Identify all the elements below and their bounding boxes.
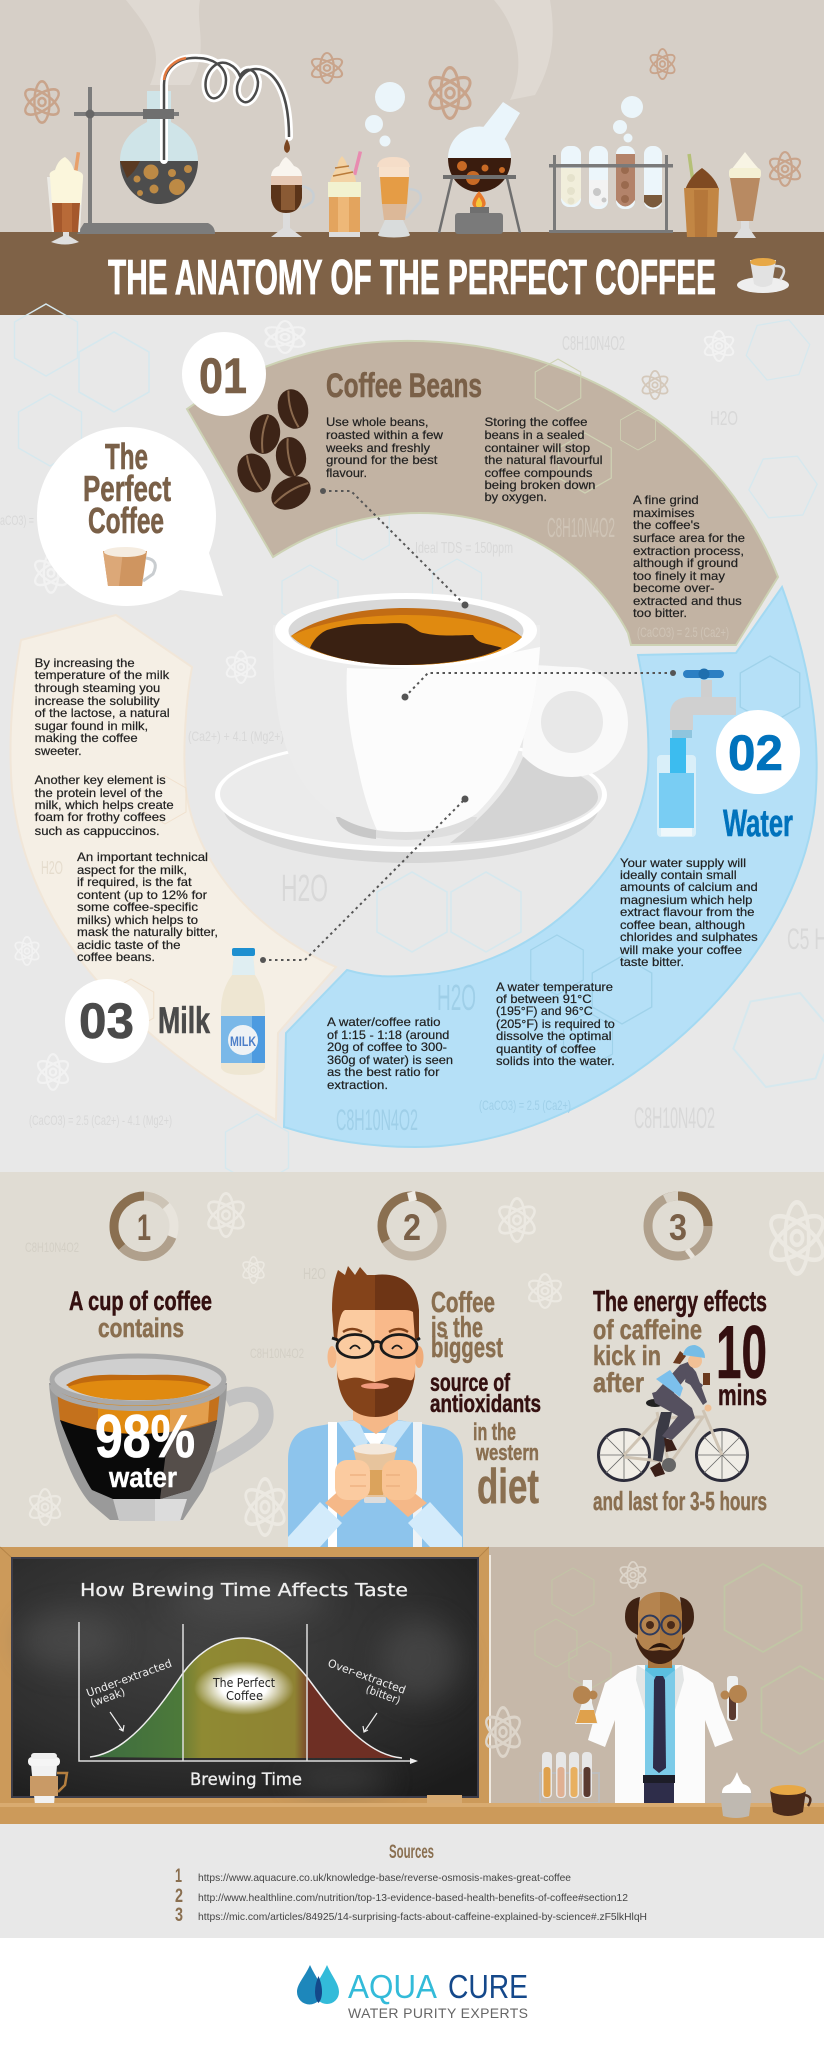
speech bubble: The Perfect Coffee (37, 427, 223, 606)
text: beans column 2: the natural flavourful (484, 453, 602, 467)
wooden shelf (0, 1803, 824, 1824)
text: water supply: chlorides and sulphates (620, 930, 758, 944)
text: beans column 1 (325, 415, 443, 480)
fact 3 text: of caffeine (593, 1314, 702, 1345)
panel: coffee beans arc: (CaCO3) = 2.5 (Ca2+) (637, 624, 729, 640)
text: water supply: amounts of calcium and (620, 880, 758, 894)
speech bubble: The Perfect Coffee: The (105, 436, 148, 477)
background formula labels: (CaCO3) = 2.5 (Ca2+) - 4.1 (Mg2+) (29, 1112, 172, 1128)
heading: Sources: Sources (389, 1842, 434, 1863)
speech bubble: The Perfect Coffee: Perfect (83, 468, 171, 509)
text: beans column 3: extraction process, (633, 544, 744, 558)
lab stand and distillation flask (74, 58, 290, 234)
panel: water arc: C8H10N4O2 (336, 1104, 418, 1137)
fact 2 text: is the (431, 1312, 483, 1344)
sources list: 2 (175, 1886, 183, 1907)
text: milk paragraph 1 (35, 656, 170, 758)
chart: brewing time curve (79, 1622, 418, 1764)
text: water temperature: (205°F) is required to (496, 1017, 615, 1031)
text: milk paragraph 1: By increasing the (35, 656, 135, 670)
text: beans column 2: Storing the coffee (484, 415, 588, 429)
bubbles (365, 82, 643, 146)
number 01 (182, 332, 266, 416)
icon: milk bottle (221, 948, 265, 1075)
panel: milk arc: H2O (41, 858, 63, 878)
fact 2 text: Coffee (431, 1287, 495, 1319)
fact 2 text: antioxidants (430, 1390, 541, 1418)
text: milk paragraph 1: making the coffee (35, 731, 138, 745)
fact 2 ring: 2 (403, 1207, 421, 1248)
text: water ratio: as the best ratio for (327, 1065, 440, 1079)
text: milk paragraph 1: of the lactose, a natural (35, 706, 170, 720)
fact 3 ring (648, 1196, 708, 1256)
test tube rack (549, 146, 673, 233)
label: under-extracted: Under-extracted (85, 1657, 174, 1700)
text: beans column 3: A fine grind (633, 493, 699, 507)
panel: water arc: (CaCO3) = 2.5 (Ca2+) (479, 1097, 571, 1113)
speech bubble: The Perfect Coffee: Coffee (88, 500, 164, 541)
facts decorations: H2O (303, 1266, 326, 1283)
heading: Coffee Beans: Coffee Beans (326, 367, 482, 405)
text: water temperature: A water temperature (496, 980, 613, 994)
title band (0, 232, 824, 315)
connector: beans to cup (320, 488, 468, 608)
text: water supply (619, 856, 758, 969)
text: water supply: Your water supply will (620, 856, 746, 870)
text: milk paragraph 1: through steaming you (35, 681, 160, 695)
facts decorations (25, 1193, 824, 1535)
text: milk paragraph 2 (35, 773, 174, 838)
number 03 (65, 979, 149, 1063)
text: milk paragraph 3: milks) which helps to (77, 913, 198, 927)
text: beans column 2 (484, 415, 602, 504)
sources list: 1 (175, 1866, 182, 1887)
icon: shelf cups (720, 1772, 810, 1818)
text: beans column 1: weeks and freshly (325, 441, 430, 455)
drink: coffee with cream (271, 157, 314, 237)
text: milk paragraph 3: acidic taste of the (77, 938, 181, 952)
text: water supply: taste bitter. (620, 955, 684, 969)
text: beans column 3: although if ground (633, 556, 738, 570)
fact 2 ring (382, 1192, 442, 1256)
coffee cup (273, 593, 628, 840)
label: over-extracted: Over-extracted (326, 1657, 407, 1697)
fact 2 text: source of (430, 1369, 510, 1397)
text: milk paragraph 1: increase the solubility (35, 694, 160, 708)
drink: tall cream glass (729, 152, 761, 238)
text: milk paragraph 2: such as cappuccinos. (35, 824, 160, 838)
text: beans column 1: roasted within a few (326, 428, 443, 442)
logo: Aqua Cure: CURE (448, 1968, 528, 2005)
chart title: How Brewing Time Affects Taste (80, 1580, 408, 1601)
chalkboard surface (13, 1559, 477, 1796)
fact 3 text: after (593, 1367, 644, 1398)
text: beans column 3: become over- (633, 581, 714, 595)
main background (0, 315, 824, 1172)
text: beans column 1: flavour. (326, 466, 367, 480)
background atoms (13, 321, 736, 1090)
illustration: scientist (573, 1592, 747, 1803)
fact 3 text: mins (718, 1379, 767, 1412)
icon: coffee beans (232, 386, 317, 516)
header background (0, 0, 824, 232)
icon: latte mug (103, 547, 155, 586)
text: water temperature: solids into the water. (496, 1054, 615, 1068)
chalk ledge (427, 1795, 462, 1804)
icon: takeaway cup (28, 1753, 67, 1806)
text: beans column 1: Use whole beans, (326, 415, 428, 429)
illustration: coffee cup 98% water: 98% (95, 1403, 195, 1470)
text: milk paragraph 2: the protein level of the (35, 786, 163, 800)
number 01: 01 (199, 348, 247, 404)
drink: iced mocha (684, 154, 719, 237)
text: water ratio: 20g of coffee to 300- (327, 1040, 447, 1054)
text: beans column 3 (633, 493, 745, 620)
heading: Milk: Milk (158, 1000, 210, 1041)
header atoms (22, 49, 803, 186)
fact 2 text (430, 1287, 541, 1514)
fact 3 text (593, 1286, 767, 1516)
text: water supply: extract flavour from the (620, 905, 755, 919)
facts decorations: C8H10N4O2 (25, 1239, 79, 1255)
chalk smudges (20, 1578, 460, 1792)
text: water supply: magnesium which help (620, 893, 753, 907)
text: beans column 2: coffee compounds (484, 466, 592, 480)
text: milk paragraph 3: coffee beans. (77, 950, 155, 964)
text: water supply: ideally contain small (620, 868, 737, 882)
chart x-axis label: Brewing Time (190, 1770, 302, 1790)
text: beans column 1: ground for the best (326, 453, 438, 467)
panel: coffee beans arc: C8H10N4O2 (547, 512, 615, 543)
background formula labels: C8H10N4O2 (634, 1102, 715, 1135)
text: milk paragraph 3: mask the naturally bitter, (77, 925, 218, 939)
icon: test tube rack (540, 1752, 599, 1803)
number 03: 03 (79, 993, 134, 1049)
number 02: 02 (728, 725, 783, 781)
fact 3 text: kick in (593, 1340, 661, 1371)
panel: water arc (284, 587, 817, 1147)
logo: Aqua Cure: WATER PURITY EXPERTS (348, 2005, 528, 2021)
fact 2 text: diet (477, 1460, 539, 1514)
right lab panel (483, 1547, 824, 1803)
drink: sundae glass (47, 152, 83, 244)
panel: sources background (0, 1824, 824, 1938)
sources list: 3 (175, 1905, 183, 1926)
text: water temperature: quantity of coffee (496, 1042, 596, 1056)
text: milk paragraph 3: some coffee-specific (77, 900, 198, 914)
text: milk paragraph 1: sugar found in milk, (35, 719, 148, 733)
text: beans column 3: the coffee's (633, 518, 700, 532)
background formula labels: aCO3) = (0, 512, 34, 528)
fact 1 ring (114, 1196, 174, 1256)
text: milk paragraph 2: Another key element is (35, 773, 166, 787)
number 02 (716, 710, 800, 794)
footer background (0, 1938, 824, 2048)
facts decorations: C8H10N4O2 (250, 1345, 304, 1361)
text: water temperature: of between 91°C (496, 992, 592, 1006)
fact 1 heading (69, 1286, 212, 1343)
text: water ratio: 360g of water) is seen (327, 1053, 453, 1067)
fact 1 heading: contains (98, 1313, 184, 1343)
connector: milk to cup (260, 796, 468, 963)
icon: title cup (737, 258, 789, 293)
illustration: bearded man (288, 1266, 463, 1547)
steam (126, 0, 553, 100)
text: beans column 2: container will stop (484, 441, 590, 455)
text: beans column 3: extracted and thus (633, 594, 742, 608)
fact 1 ring: 1 (137, 1207, 151, 1248)
panel: water arc: H2O (437, 977, 476, 1018)
text: water temperature: dissolve the optimal (496, 1029, 612, 1043)
background formula labels: C8H10N4O2 (562, 333, 625, 355)
sources list (175, 1866, 647, 1926)
background formula labels: Ideal TDS = 150ppm (415, 540, 513, 557)
fact 2 text: biggest (431, 1332, 503, 1364)
text: beans column 2: by oxygen. (484, 490, 547, 504)
fact 1 heading: A cup of coffee (69, 1286, 212, 1316)
fact 3 ring: 3 (669, 1207, 687, 1248)
text: beans column 3: maximises (633, 506, 694, 520)
sources list: https://mic.com/articles/84925/14-surprising-facts-about-caffeine-explained-by-science#.zF5lkHlqH (198, 1911, 647, 1923)
text: milk paragraph 3 (77, 850, 218, 964)
text: water ratio: A water/coffee ratio (327, 1015, 441, 1029)
text: beans column 2: being broken down (484, 478, 596, 492)
burner with round flask (439, 102, 520, 234)
text: milk paragraph 2: milk, which helps create (35, 798, 174, 812)
text: beans column 2: beans in a sealed (484, 428, 584, 442)
text: milk paragraph 3: if required, is the fat (77, 875, 192, 889)
text: water supply: coffee bean, although (620, 918, 745, 932)
illustration: coffee cup 98% water: water (108, 1462, 177, 1494)
text: water ratio: extraction. (327, 1078, 388, 1092)
text: milk paragraph 3: content (up to 12% for (77, 888, 207, 902)
text: milk paragraph 3: aspect for the milk, (77, 863, 187, 877)
label: The Perfect Coffee (212, 1676, 275, 1703)
sources list: https://www.aquacure.co.uk/knowledge-base/reverse-osmosis-makes-great-coffee (198, 1872, 571, 1884)
background formula labels: (Ca2+) + 4.1 (Mg2+) (188, 728, 284, 744)
text: milk paragraph 3: An important technical (77, 850, 208, 864)
label: under-extracted: (weak) (89, 1685, 127, 1710)
text: water supply: will make your coffee (619, 943, 742, 957)
background formula labels: H2O (710, 408, 738, 430)
panel: milk arc (10, 615, 336, 1120)
text: water temperature: (195°F) and 96°C (496, 1004, 593, 1018)
panel: chalkboard frame (0, 1547, 489, 1804)
background hexagons (14, 304, 824, 1186)
background formula labels: H2O (281, 868, 328, 910)
icon: tap and glass (657, 668, 736, 837)
text: beans column 3: too finely it may (633, 569, 725, 583)
text: water temperature (496, 980, 615, 1068)
cup handle (522, 665, 628, 777)
text: milk paragraph 1: temperature of the milk (35, 668, 170, 682)
label: The Perfect Coffee: Coffee (226, 1689, 263, 1703)
saucer (215, 738, 607, 863)
logo: Aqua Cure: AQUA (348, 1968, 437, 2005)
label: The Perfect Coffee: The Perfect (212, 1676, 275, 1690)
fact 2 text: in the (473, 1419, 516, 1446)
text: milk paragraph 2: foam for frothy coffees (35, 810, 166, 824)
sources list: http://www.healthline.com/nutrition/top-13-evidence-based-health-benefits-of-coffee#section12 (198, 1892, 628, 1904)
label: over-extracted: (bitter) (364, 1683, 402, 1707)
logo: Aqua Cure (297, 1965, 528, 2021)
icon: milk bottle: MILK (230, 1033, 256, 1049)
text: beans column 3: surface area for the (633, 531, 745, 545)
text: beans column 3: too bitter. (633, 606, 687, 620)
text: milk paragraph 1: sweeter. (35, 744, 82, 758)
arrows (110, 1712, 377, 1732)
drink: tall latte (377, 157, 421, 238)
panel: coffee beans arc (187, 341, 778, 645)
fact 3 text: 10 (716, 1310, 767, 1394)
fact 2 text: western (475, 1440, 539, 1465)
text: water ratio: of 1:15 - 1:18 (around (327, 1028, 449, 1042)
panel: facts background (0, 1172, 824, 1547)
drink: layered latte with whipped top (328, 151, 362, 237)
text: water ratio (327, 1015, 453, 1092)
background formula labels (0, 333, 824, 1135)
illustration: coffee cup 98% water (49, 1356, 266, 1521)
illustration: cyclist (598, 1345, 748, 1480)
connector: water to cup (402, 670, 676, 700)
